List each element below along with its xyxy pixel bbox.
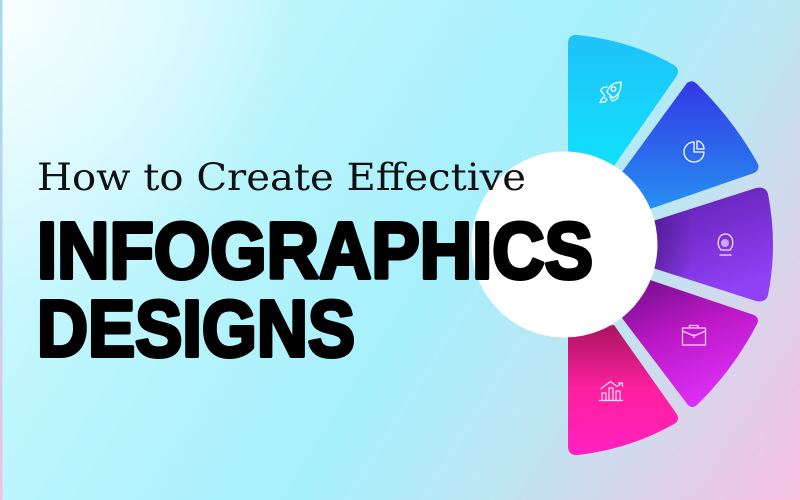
segment 5: magenta with growth chart: [568, 325, 678, 455]
title line 2: DESIGNS: [37, 284, 355, 373]
segment 2: blue with pie chart: [622, 81, 758, 209]
title: [37, 206, 593, 373]
white centre circle: [472, 152, 658, 338]
subtitle: How to Create Effective: [37, 156, 526, 199]
segment 1: cyan with rocket: [568, 35, 678, 175]
title line 1: INFOGRAPHICS: [37, 206, 593, 295]
icon: light bulb: [718, 234, 733, 255]
icon: briefcase: [682, 326, 706, 345]
segment 4: purple with briefcase: [622, 280, 758, 407]
segmented fan diagram: [568, 35, 773, 455]
icon: pie chart: [684, 141, 704, 162]
icon: growth chart: [599, 382, 623, 400]
segment 3: violet with light bulb: [652, 188, 773, 301]
icon: rocket: [600, 82, 621, 102]
